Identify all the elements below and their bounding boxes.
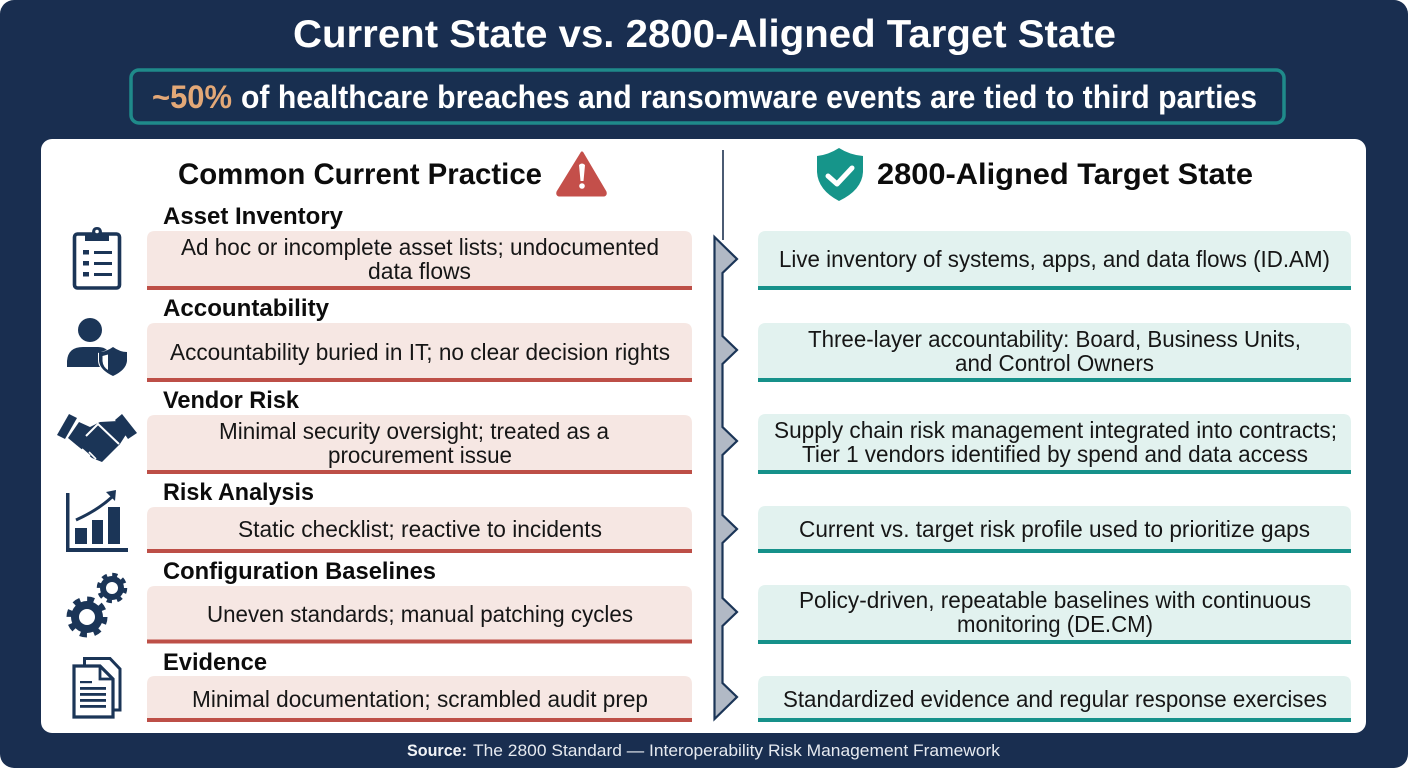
source footer: The 2800 Standard — Interoperability Risk Management Framework bbox=[473, 742, 1001, 760]
row: configuration baselines bbox=[69, 558, 1351, 644]
icon: handshake bbox=[57, 414, 137, 462]
target box: and Control Owners bbox=[955, 350, 1154, 376]
target box: Three-layer accountability: Board, Business Units, bbox=[808, 326, 1301, 352]
center divider with chevrons bbox=[714, 150, 737, 719]
current box bbox=[147, 507, 692, 553]
current box: Minimal documentation; scrambled audit prep bbox=[192, 686, 648, 712]
target box bbox=[758, 323, 1351, 382]
target box: Policy-driven, repeatable baselines with continuous bbox=[799, 587, 1311, 613]
main panel bbox=[41, 139, 1366, 733]
label: Risk Analysis bbox=[163, 479, 314, 506]
row: accountability bbox=[67, 295, 1351, 382]
current box: Minimal security oversight; treated as a bbox=[219, 418, 609, 444]
current box bbox=[147, 415, 692, 474]
icon: clipboard bbox=[74, 227, 120, 288]
current box: Accountability buried in IT; no clear decision rights bbox=[170, 339, 670, 365]
icon: growth chart bbox=[66, 490, 128, 552]
label: Asset Inventory bbox=[163, 203, 344, 230]
current box bbox=[147, 586, 692, 644]
callout banner bbox=[131, 70, 1284, 123]
current box: Uneven standards; manual patching cycles bbox=[207, 601, 633, 627]
callout banner: of healthcare breaches and ransomware events are tied to third parties bbox=[241, 79, 1257, 115]
current box bbox=[147, 323, 692, 382]
current box: Static checklist; reactive to incidents bbox=[238, 516, 602, 542]
target box bbox=[758, 506, 1351, 553]
current box: procurement issue bbox=[328, 442, 512, 468]
title: Current State vs. 2800-Aligned Target State bbox=[293, 13, 1116, 56]
icon: shield check bbox=[817, 148, 863, 201]
target box: Supply chain risk management integrated into contracts; bbox=[774, 417, 1337, 443]
target box: Current vs. target risk profile used to prioritize gaps bbox=[799, 516, 1310, 542]
target box: monitoring (DE.CM) bbox=[957, 611, 1153, 637]
label: Configuration Baselines bbox=[163, 558, 436, 585]
current box bbox=[147, 231, 692, 290]
row: risk analysis bbox=[66, 479, 1351, 553]
callout banner: ~50% bbox=[152, 79, 232, 115]
current box bbox=[147, 676, 692, 722]
heading: current practice bbox=[178, 153, 605, 195]
heading: target state: 2800-Aligned Target State bbox=[877, 158, 1253, 191]
icon: warning triangle bbox=[558, 153, 605, 195]
target box: Tier 1 vendors identified by spend and data access bbox=[802, 441, 1308, 467]
row: evidence bbox=[74, 649, 1351, 722]
target box: Standardized evidence and regular response exercises bbox=[783, 686, 1327, 712]
heading: target state bbox=[817, 148, 1253, 201]
heading: current practice: Common Current Practice bbox=[178, 158, 542, 191]
target box bbox=[758, 231, 1351, 290]
icon: documents bbox=[74, 658, 120, 717]
label: Evidence bbox=[163, 649, 267, 676]
target box: Live inventory of systems, apps, and data flows (ID.AM) bbox=[779, 246, 1330, 272]
current box: data flows bbox=[368, 258, 471, 284]
icon: person with shield bbox=[67, 318, 127, 376]
row: vendor risk bbox=[57, 387, 1351, 474]
current box: Ad hoc or incomplete asset lists; undocumented bbox=[181, 234, 659, 260]
target box bbox=[758, 676, 1351, 722]
label: Accountability bbox=[163, 295, 330, 322]
source footer: Source: bbox=[407, 742, 467, 760]
label: Vendor Risk bbox=[163, 387, 300, 414]
icon: gears bbox=[69, 574, 126, 635]
row: asset inventory bbox=[74, 203, 1351, 290]
target box bbox=[758, 585, 1351, 644]
target box bbox=[758, 414, 1351, 474]
